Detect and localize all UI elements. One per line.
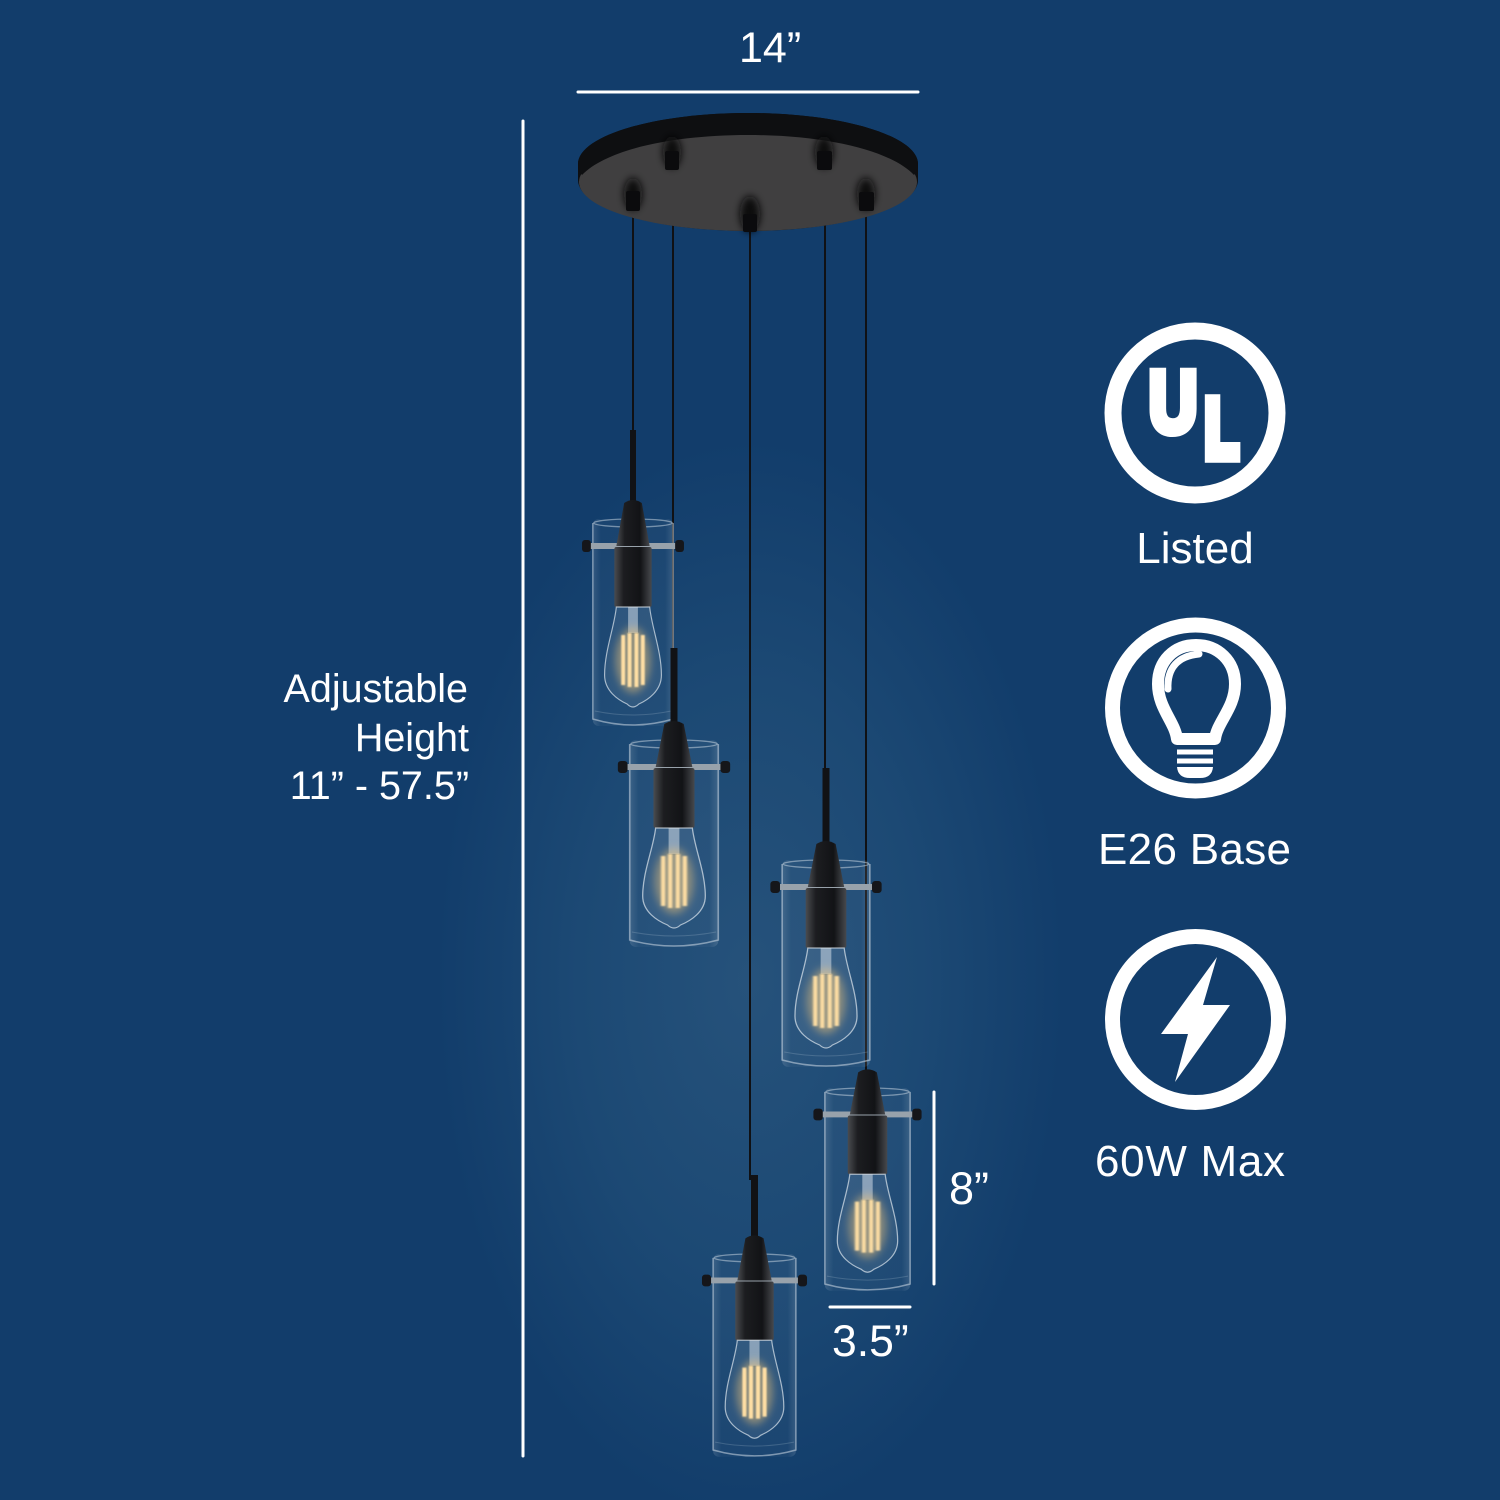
dimension: canopy width 14 inch: 14”: [739, 24, 801, 72]
pendant 5: [702, 1175, 807, 1457]
pendant 4: [813, 1069, 922, 1291]
pendant 1: [582, 430, 684, 726]
icon: 60W lightning bolt: [1112, 936, 1278, 1102]
icon: UL listed: U: [1149, 354, 1197, 450]
label: 60W max: 60W Max: [1095, 1137, 1285, 1186]
dimension: adjustable height line: [522, 121, 524, 1456]
label: adjustable height: [284, 667, 469, 808]
label: adjustable height: Height: [355, 716, 469, 760]
pendant 3: [770, 768, 882, 1067]
label: E26 base: E26 Base: [1098, 825, 1291, 874]
cords: [633, 165, 866, 1180]
icon: UL listed: [1113, 331, 1277, 495]
dimension: shade width 3.5 inch: 3.5”: [832, 1317, 909, 1366]
label: adjustable height: Adjustable: [284, 667, 468, 711]
icon: UL listed: L: [1205, 383, 1238, 475]
label: adjustable height: 11” - 57.5”: [290, 764, 469, 808]
icon: E26 base bulb: [1112, 625, 1278, 791]
dimension: shade height 8 inch: 8”: [949, 1163, 989, 1214]
ceiling canopy: [578, 113, 918, 232]
label: listed: Listed: [1136, 524, 1254, 573]
pendant 2: [618, 648, 730, 947]
